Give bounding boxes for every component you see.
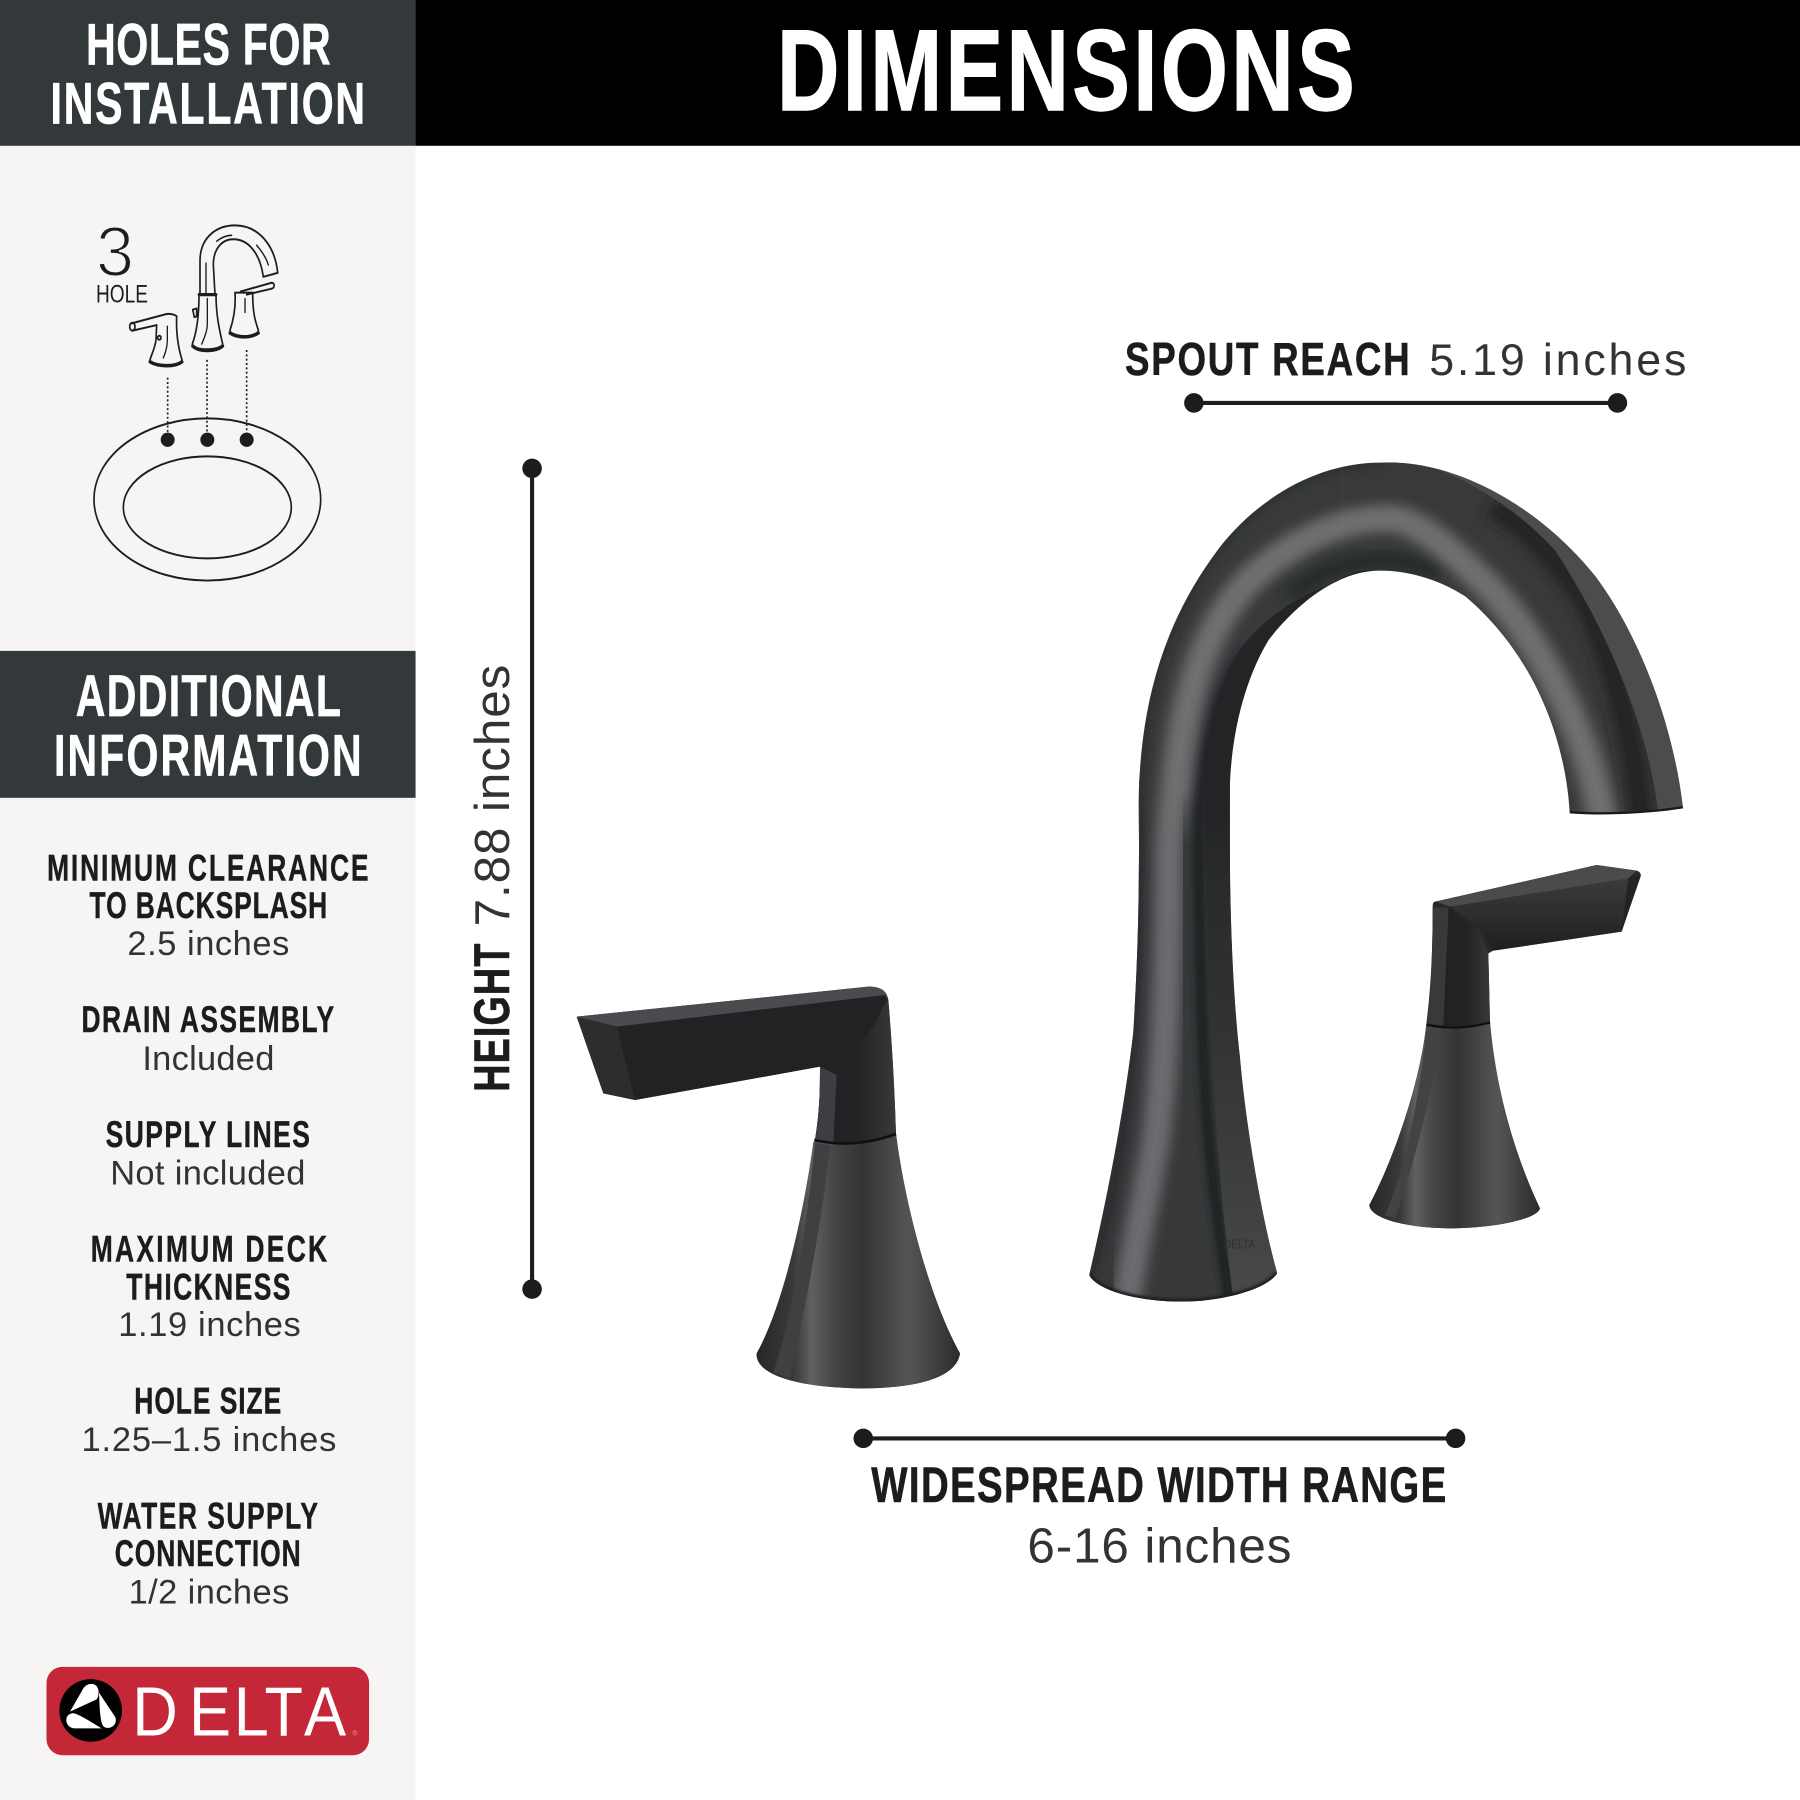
spec: maximum deck thickness: 1.19 inches xyxy=(118,1306,301,1344)
icon: three hole sink diagram: HOLE xyxy=(96,280,148,308)
header: additional information: ADDITIONAL xyxy=(76,662,341,728)
panel: left sidebar xyxy=(0,0,416,1800)
spec: maximum deck thickness xyxy=(91,1228,327,1344)
logo: delta xyxy=(46,1667,369,1755)
spec: supply lines: SUPPLY LINES xyxy=(106,1114,310,1155)
spec: maximum deck thickness: MAXIMUM DECK xyxy=(91,1228,327,1270)
spec: water supply connection xyxy=(98,1495,318,1612)
spec: water supply connection: 1/2 inches xyxy=(129,1574,289,1612)
spec: hole size: 1.25–1.5 inches xyxy=(82,1421,336,1459)
dimension: widespread width range: WIDESPREAD WIDTH RANGE xyxy=(871,1456,1446,1513)
spec: minimum clearance: TO BACKSPLASH xyxy=(90,885,327,926)
faucet: right handle xyxy=(1369,865,1641,1228)
spec: water supply connection: WATER SUPPLY xyxy=(98,1495,318,1537)
dimension: widespread width range: 6-16 inches xyxy=(1027,1518,1291,1573)
header: dimensions xyxy=(416,0,1800,146)
header: holes for installation: INSTALLATION xyxy=(51,70,365,136)
logo: delta: DELTA xyxy=(132,1674,347,1751)
dimension: height: 7.88 inches xyxy=(465,665,520,926)
header: holes for installation xyxy=(0,0,416,146)
dimension: height: HEIGHT xyxy=(465,944,520,1092)
spec: water supply connection: CONNECTION xyxy=(115,1533,301,1574)
dimension: spout reach: SPOUT REACH xyxy=(1125,333,1410,385)
spec: minimum clearance xyxy=(47,847,369,963)
header: additional information: INFORMATION xyxy=(54,722,362,788)
spec: hole size: HOLE SIZE xyxy=(134,1380,281,1422)
spec: supply lines: Not included xyxy=(110,1155,305,1193)
header: holes for installation: HOLES FOR xyxy=(86,11,331,77)
logo: delta: ® xyxy=(352,1730,358,1738)
spec: minimum clearance: 2.5 inches xyxy=(127,925,289,963)
icon: three hole sink diagram xyxy=(94,212,321,581)
faucet: left handle xyxy=(577,987,960,1388)
icon: three hole sink diagram: 3 xyxy=(96,212,134,291)
dimension: height xyxy=(465,459,542,1299)
spec: hole size xyxy=(82,1380,336,1459)
spec: drain assembly: DRAIN ASSEMBLY xyxy=(82,999,334,1040)
spec: supply lines xyxy=(106,1114,310,1193)
dimension: spout reach xyxy=(1125,333,1686,413)
spec: maximum deck thickness: THICKNESS xyxy=(126,1266,290,1308)
spec: drain assembly xyxy=(82,999,334,1078)
header: dimensions: DIMENSIONS xyxy=(777,6,1355,135)
faucet: spout body lower: DELTA xyxy=(1224,1238,1255,1252)
spec: minimum clearance: MINIMUM CLEARANCE xyxy=(47,847,369,889)
header: additional information xyxy=(0,651,416,798)
dimension: widespread width range xyxy=(854,1429,1465,1573)
faucet: spout body lower xyxy=(1089,780,1278,1302)
faucet: spout arc upper xyxy=(1138,462,1683,841)
spec: drain assembly: Included xyxy=(142,1040,274,1078)
dimension: spout reach: 5.19 inches xyxy=(1429,335,1686,385)
